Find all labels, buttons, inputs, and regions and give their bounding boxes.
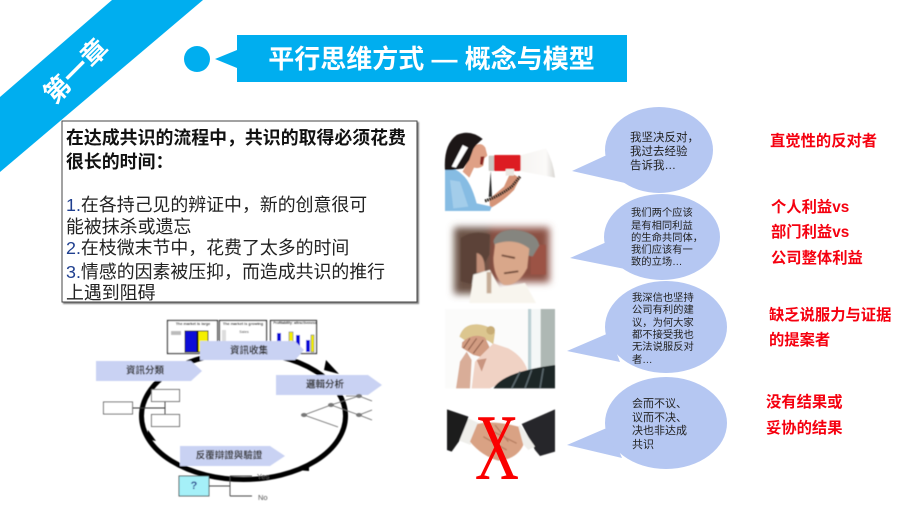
title bar xyxy=(215,35,627,82)
label: no result or compromise: 没有结果或 xyxy=(766,393,842,411)
photo: woman with megaphone xyxy=(445,133,555,211)
panel list: 2.在枝微末节中，花费了太多的时间 xyxy=(66,238,349,258)
panel list: 能被抹杀或遗忘 xyxy=(66,217,191,237)
arrow label: debate and verification: 反覆辯證與驗證 xyxy=(196,450,263,462)
speech bubble 1: 我过去经验 xyxy=(630,144,688,158)
panel list: 3.情感的因素被压抑，而造成共识的推行 xyxy=(66,262,385,282)
arrow label: logic analysis xyxy=(276,375,382,395)
chapter banner: 第一章 xyxy=(38,33,114,109)
speech bubble 3: 我深信也坚持 xyxy=(632,291,694,304)
red cross mark: X xyxy=(475,396,519,500)
speech bubble 1 xyxy=(572,107,713,193)
arrow label: information classification xyxy=(96,361,202,381)
cycle diagram xyxy=(96,320,382,502)
panel list: 1.在各持己见的辨证中，新的创意很可 xyxy=(66,195,367,215)
photo: stressed woman xyxy=(445,309,555,388)
arrow label: debate and verification xyxy=(180,446,285,466)
speech bubble 1: 我坚决反对， xyxy=(630,130,699,144)
question decision box: ? xyxy=(191,480,198,492)
label: conflicting interests: 部门利益vs xyxy=(771,223,849,241)
title pointer dot xyxy=(184,46,210,72)
label: conflicting interests: 公司整体利益 xyxy=(771,249,863,267)
speech bubble 4: 会而不议、 xyxy=(632,397,687,410)
speech bubble 3 xyxy=(567,281,727,373)
classification tree boxes xyxy=(104,390,180,426)
speech bubble 2: 我们两个应该 xyxy=(631,206,693,219)
text panel: consensus process xyxy=(62,121,417,303)
mini chart 1 xyxy=(168,320,218,354)
panel heading: 在达成共识的流程中，共识的取得必须花费 xyxy=(66,127,406,148)
speech bubble 4: 议而不决、 xyxy=(632,411,687,424)
panel heading: 很长的时间： xyxy=(66,152,173,172)
photo: handshake xyxy=(447,396,555,500)
arrow label: information collection: 資訊收集 xyxy=(230,344,268,356)
label: unpersuasive proposer: 的提案者 xyxy=(769,331,830,349)
speech bubble 4 xyxy=(567,377,727,469)
mini chart 2 xyxy=(220,320,266,354)
speech bubble 2: 致的立场… xyxy=(631,255,682,268)
speech bubble 2: 的生命共同体， xyxy=(631,231,703,244)
speech bubble 3: 议，为何大家 xyxy=(632,316,694,329)
label: conflicting interests: 个人利益vs xyxy=(771,198,849,216)
speech bubble 4: 决也非达成 xyxy=(632,424,687,437)
speech bubble 3: 无法说服反对 xyxy=(632,340,694,353)
speech bubble 2: 是有相同利益 xyxy=(631,219,693,232)
speech bubble 2: 我们应该有一 xyxy=(631,243,693,256)
arrow label: information classification: 資訊分類 xyxy=(126,364,164,376)
photo: serious man xyxy=(454,227,549,303)
question decision box: Yes xyxy=(257,472,269,481)
speech bubble 1: 告诉我… xyxy=(630,159,676,172)
label: intuitive opponent: 直觉性的反对者 xyxy=(770,132,877,150)
label: no result or compromise: 妥协的结果 xyxy=(766,419,842,437)
speech bubble 2 xyxy=(570,194,720,280)
chapter banner xyxy=(0,0,203,172)
title bar: 平行思维方式 — 概念与模型 xyxy=(268,44,595,74)
speech bubble 4: 共识 xyxy=(632,438,654,451)
mini chart 3 xyxy=(270,320,317,354)
mini chart 2: The market is growing xyxy=(223,322,264,326)
mini chart 2: Sales xyxy=(239,330,249,334)
label: unpersuasive proposer: 缺乏说服力与证据 xyxy=(769,306,891,324)
speech bubble 3: 都不接受我也 xyxy=(632,328,694,341)
logic tree xyxy=(301,394,372,427)
panel list: 上遇到阻碍 xyxy=(66,283,156,303)
cycle ring xyxy=(142,352,346,480)
speech bubble 3: 公司有利的建 xyxy=(632,303,694,316)
arrow label: logic analysis: 邏輯分析 xyxy=(306,378,344,390)
question decision box: No xyxy=(258,493,268,502)
mini chart 1: The market is large xyxy=(176,322,210,326)
speech bubble 3: 者… xyxy=(632,354,653,366)
question decision box xyxy=(179,472,269,502)
mini chart 3: Profitability: attractiveness xyxy=(273,321,317,325)
arrow label: information collection xyxy=(200,341,304,360)
